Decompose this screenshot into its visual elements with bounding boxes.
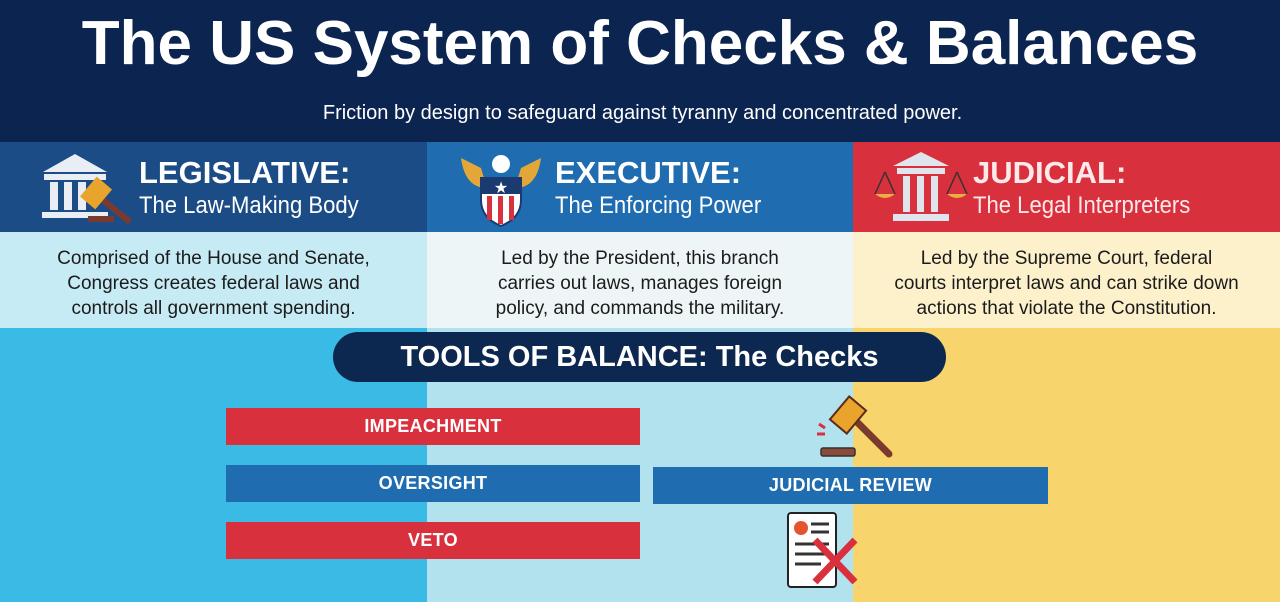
text: judicial description: courts interpret laws and can strike down	[894, 273, 1239, 294]
text: executive description: Led by the President, this branch	[501, 248, 779, 269]
text: executive description	[427, 232, 853, 328]
heading: judicial: JUDICIAL:	[973, 155, 1126, 190]
icon: document with X	[787, 512, 858, 588]
bar: judicial review: JUDICIAL REVIEW	[769, 475, 932, 495]
panel: judicial header	[853, 142, 1280, 232]
icon: courthouse with scales	[874, 152, 968, 221]
heading: executive: EXECUTIVE:	[555, 155, 741, 190]
bar: impeachment	[226, 408, 640, 445]
icon: capitol with gavel	[42, 154, 132, 224]
icon: gavel	[817, 395, 892, 458]
bar: judicial review	[653, 467, 1048, 504]
heading: tools of balance pill	[333, 332, 946, 382]
panel: executive header	[427, 142, 853, 232]
bar: veto	[226, 522, 640, 559]
text: legislative description	[0, 232, 427, 328]
bar: impeachment: IMPEACHMENT	[364, 416, 502, 436]
panel: checks background	[0, 328, 1280, 602]
panel: judicial header: The Legal Interpreters	[973, 192, 1190, 219]
heading: tools of balance pill: TOOLS OF BALANCE: The Checks	[400, 341, 879, 373]
text: legislative description: Comprised of the House and Senate,	[57, 248, 370, 269]
text: judicial description: actions that violate the Constitution.	[917, 298, 1216, 319]
text: judicial description	[853, 232, 1280, 328]
heading: legislative: LEGISLATIVE:	[139, 155, 350, 190]
bar: veto: VETO	[408, 530, 458, 550]
panel: legislative header: The Law-Making Body	[139, 192, 359, 219]
text: executive description: policy, and commands the military.	[496, 298, 784, 319]
bar: oversight	[226, 465, 640, 502]
text: legislative description: Congress creates federal laws and	[67, 273, 360, 294]
text: executive description: carries out laws, manages foreign	[498, 273, 782, 294]
panel: legislative header	[0, 142, 427, 232]
panel: executive header: The Enforcing Power	[555, 192, 761, 219]
icon: eagle shield: ★	[494, 180, 508, 197]
bar: oversight: OVERSIGHT	[379, 473, 487, 493]
text: judicial description: Led by the Supreme Court, federal	[921, 248, 1212, 269]
subtitle: Friction by design to safeguard against tyranny and concentrated power.	[323, 102, 962, 124]
icon: eagle shield	[461, 155, 541, 227]
text: legislative description: controls all government spending.	[71, 298, 356, 319]
title: The US System of Checks & Balances	[82, 9, 1198, 78]
